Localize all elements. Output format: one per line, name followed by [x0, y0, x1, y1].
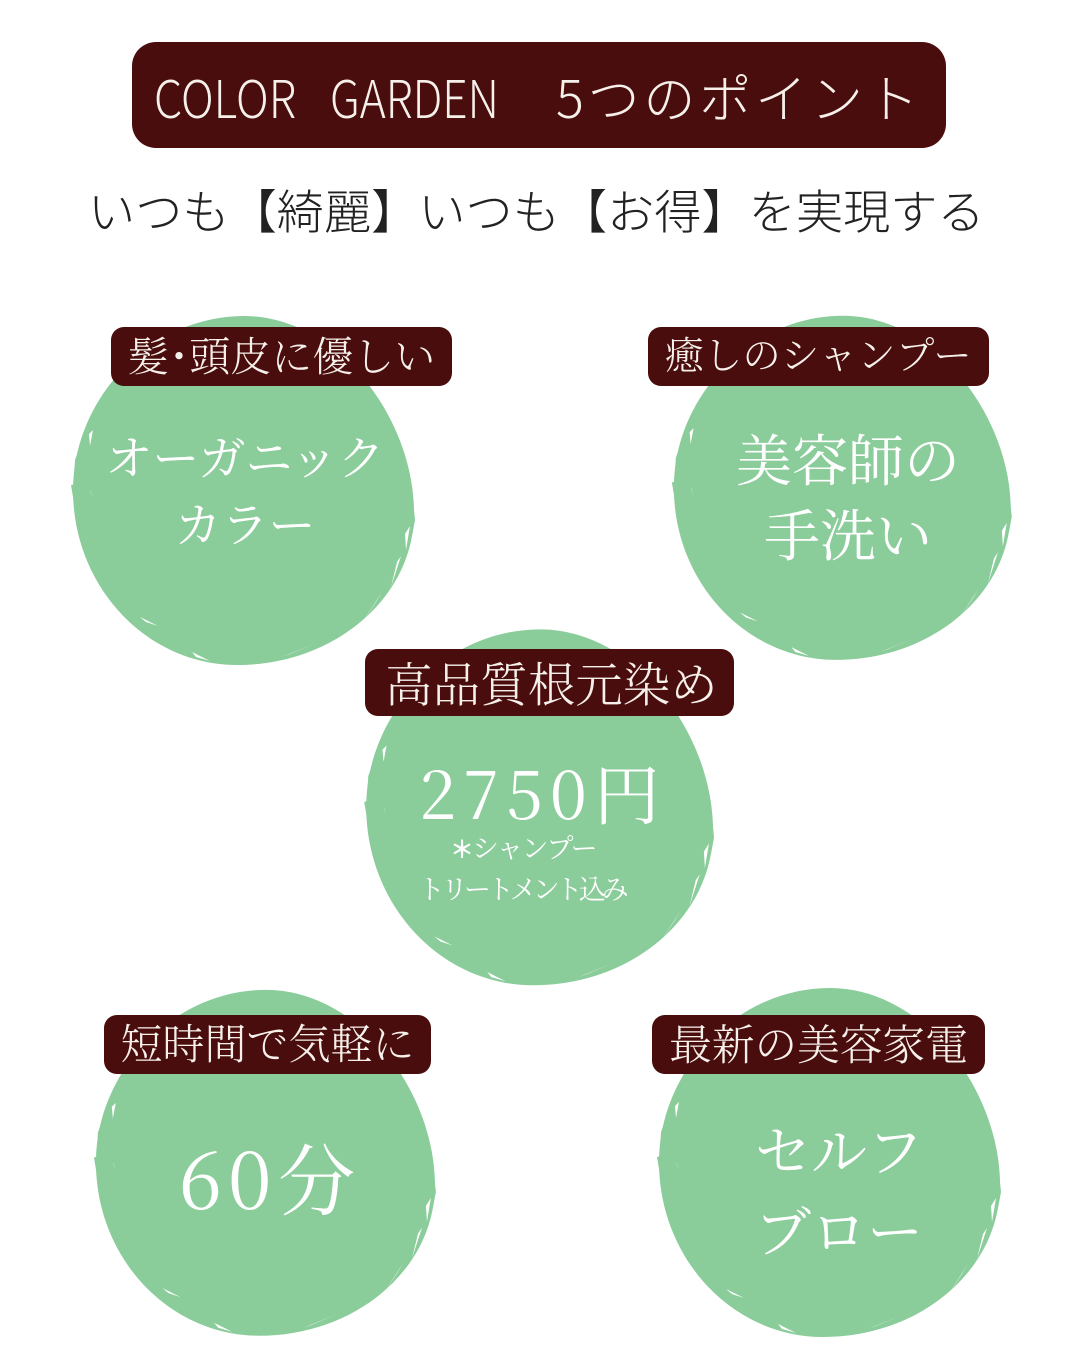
label: gentle on hair: 髪･頭皮に優しい — [128, 324, 435, 383]
text: organic colour: オーガニック — [105, 422, 385, 489]
text: hand wash: 手洗い — [764, 493, 932, 573]
text: price: 2750円 — [419, 743, 667, 838]
circle: organic colour — [71, 316, 415, 665]
text: hand wash: 美容師の — [736, 418, 960, 498]
text: self blow: ブロー — [755, 1189, 923, 1269]
title banner — [132, 42, 946, 148]
text: price note: ＊シャンプー — [450, 827, 596, 866]
text: organic colour — [105, 422, 385, 556]
text: price note: トリートメント込み — [418, 868, 625, 907]
title banner: 5つのポイント — [556, 58, 922, 133]
text: self blow: セルフ — [755, 1109, 923, 1189]
circle: root dye — [364, 629, 714, 985]
circle: self blow — [657, 988, 1001, 1337]
text: sixty minutes: 60分 — [178, 1120, 361, 1232]
text: organic colour: カラー — [174, 489, 316, 556]
label: root dye: 高品質根元染め — [385, 647, 718, 716]
subtitle: いつも【綺麗】いつも【お得】を実現する — [88, 174, 985, 243]
text: self blow — [755, 1109, 923, 1269]
circle: sixty minutes — [94, 990, 436, 1336]
circle: shampoo — [672, 316, 1012, 660]
title banner: COLOR — [154, 58, 296, 133]
text: price note — [418, 827, 627, 907]
label: healing shampoo: 癒しのシャンプー — [665, 326, 972, 381]
text: hand wash — [736, 418, 960, 573]
title banner: GARDEN — [330, 58, 499, 133]
label: latest appliances: 最新の美容家電 — [669, 1012, 968, 1073]
label: short time: 短時間で気軽に — [120, 1012, 414, 1072]
